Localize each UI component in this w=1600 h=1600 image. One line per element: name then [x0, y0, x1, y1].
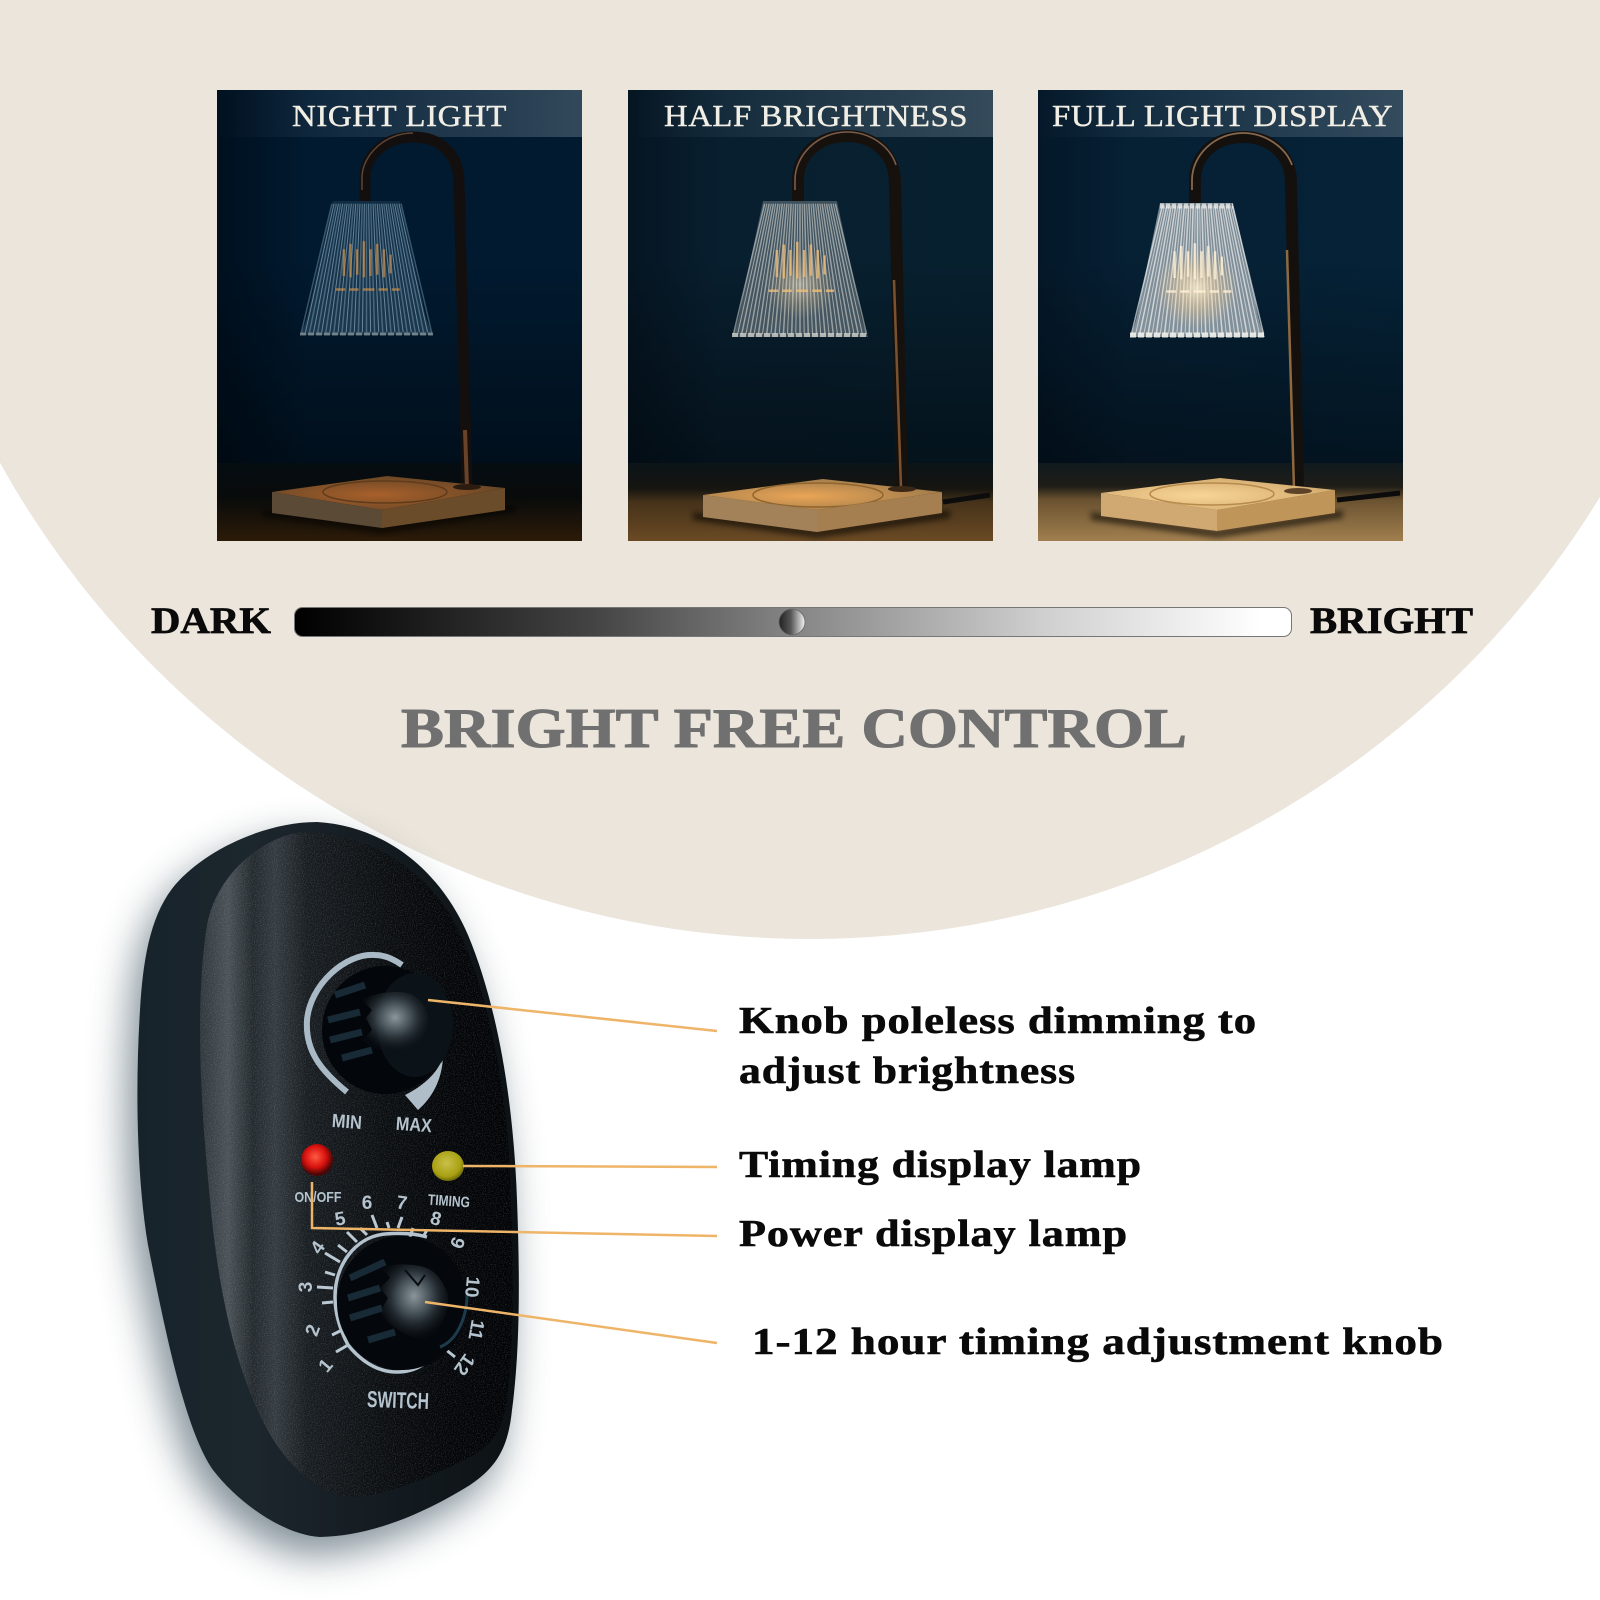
- glass shade: [1130, 203, 1265, 337]
- power cord: [943, 495, 990, 502]
- gradient bar: [294, 608, 1292, 636]
- callout: timing lamp: Timing display lamp: [739, 1144, 1142, 1186]
- leader: power lamp: [312, 1182, 717, 1236]
- power cord: [1337, 493, 1400, 500]
- lamp arm: [362, 133, 467, 487]
- leader: timing lamp: [463, 1166, 717, 1167]
- timer dial numbers: 12: [449, 1349, 478, 1379]
- remote control: [137, 822, 520, 1537]
- label: bright: BRIGHT: [1310, 601, 1473, 642]
- lamp arm: [1192, 133, 1298, 490]
- timer dial numbers: 9: [445, 1234, 468, 1251]
- wooden base: [1091, 478, 1343, 538]
- leader lines: [312, 1000, 717, 1343]
- body shell: [137, 822, 519, 1537]
- remote control shadow: [127, 840, 509, 1555]
- timer dial numbers: 8: [428, 1208, 443, 1231]
- face texture: [195, 830, 520, 1500]
- timer dial numbers: 11: [463, 1318, 488, 1342]
- slider thumb: [779, 609, 805, 635]
- floor: [1038, 463, 1403, 541]
- timer dial numbers: 2: [302, 1322, 325, 1339]
- callout: power lamp: Power display lamp: [739, 1213, 1128, 1255]
- text: TIMING: TIMING: [427, 1192, 470, 1211]
- LED: power: [301, 1144, 333, 1176]
- text: MAX: MAX: [395, 1114, 433, 1137]
- dimmer arc: [307, 955, 402, 1092]
- timer dial ring: [335, 1233, 440, 1372]
- label band: [628, 90, 993, 137]
- MAX wedge: [405, 1057, 443, 1110]
- timer dial numbers: 6: [362, 1193, 372, 1214]
- glass shade: [732, 201, 868, 337]
- beige circle backdrop: [0, 0, 1600, 939]
- text: ON/OFF: ON/OFF: [294, 1189, 342, 1206]
- LED: timing: [432, 1151, 464, 1181]
- title: full light display: FULL LIGHT DISPLAY: [1052, 98, 1393, 133]
- label band: [1038, 90, 1403, 137]
- heading: BRIGHT FREE CONTROL: [401, 698, 1187, 760]
- title: night light: NIGHT LIGHT: [292, 98, 507, 133]
- label: dark: DARK: [151, 601, 271, 642]
- panel: night light: [217, 90, 582, 541]
- timer knob: [337, 1236, 467, 1370]
- timer dial numbers: 1: [315, 1355, 338, 1377]
- leader: timer knob: [425, 1302, 717, 1343]
- timer dial numbers: 5: [333, 1208, 348, 1231]
- label band: [217, 90, 582, 137]
- text: MIN: MIN: [331, 1111, 363, 1134]
- callout: dimmer knob: adjust brightness: [739, 1050, 1076, 1092]
- glass shade: [300, 201, 433, 335]
- callout: timer knob: 1-12 hour timing adjustment knob: [752, 1321, 1444, 1363]
- lamp arm: [795, 132, 902, 488]
- callout: dimmer knob: [739, 1000, 1257, 1092]
- timer dial numbers: [296, 1192, 488, 1379]
- title: half brightness: HALF BRIGHTNESS: [664, 98, 968, 133]
- timer dial numbers: 4: [307, 1237, 330, 1258]
- panel: half brightness: [628, 90, 993, 541]
- floor: [628, 463, 993, 541]
- face plate: [200, 832, 513, 1497]
- timer dial ticks: [317, 1215, 455, 1357]
- wooden base: [262, 476, 515, 534]
- timer dial numbers: 7: [395, 1192, 408, 1215]
- feature callouts: [739, 1000, 1444, 1363]
- callout: dimmer knob: Knob poleless dimming to: [739, 1000, 1257, 1042]
- floor: [217, 463, 582, 541]
- panel: full light display: [1038, 90, 1403, 541]
- dimmer knob: [322, 966, 453, 1094]
- timer dial numbers: 10: [460, 1275, 483, 1298]
- text: SWITCH: SWITCH: [367, 1386, 429, 1414]
- brightness scale: [151, 601, 1473, 642]
- leader: dimmer knob: [428, 1000, 717, 1031]
- wooden base: [693, 479, 950, 538]
- timer dial numbers: 3: [296, 1282, 317, 1292]
